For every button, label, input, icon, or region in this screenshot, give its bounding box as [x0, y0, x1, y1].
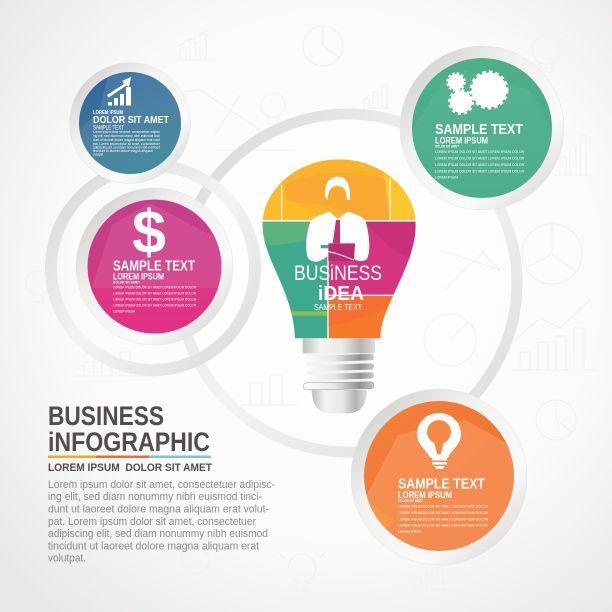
icon: gears: [448, 72, 507, 114]
panel: idea circle: [351, 389, 527, 565]
icon: businessman silhouette: [306, 177, 369, 262]
body paragraph: Lorem ipsum dolor sit amet, consectetuer adipisc-: [48, 479, 275, 491]
settings text: DOLOR SIT AMET: [435, 144, 459, 148]
settings text: LOREM IPSUM DOLOR SIT AMET LOREM IPSUM DOLOR: [435, 163, 524, 167]
idea text: DOLOR SIT AMET: [398, 498, 423, 503]
idea text: LOREM IPSUM DOLOR SIT AMET LOREM IPSUM DOLOR: [398, 524, 488, 528]
growth text: volutpat.: [93, 152, 104, 156]
heading: BUSINESS: [48, 401, 164, 431]
growth text: DOLOR SIT AMET: [93, 114, 169, 126]
idea text: LOREM IPSUM DOLOR SIT AMET LOREM IPSUM DOLOR: [398, 518, 488, 522]
finance text: LOREM IPSUM DOLOR SIT AMET LOREM IPSUM DOLOR: [113, 304, 196, 308]
subheading: LOREM IPSUM DOLOR SIT AMET: [48, 462, 212, 474]
growth text: dunt ut laoreet dolore magna aliquam erat volut: [93, 138, 161, 142]
growth text: ing elit, sed diam nonummy nibh euismod tinci: [93, 134, 160, 138]
finance text: LOREM IPSUM DOLOR SIT AMET LOREM IPSUM DOLOR: [113, 292, 196, 296]
growth text: LOREM IPSUM: [93, 110, 123, 116]
settings text: LOREM IPSUM: [435, 176, 458, 180]
heading: iNFOGRAPHIC: [48, 427, 210, 457]
central light bulb: [260, 157, 420, 413]
heading: [48, 401, 210, 457]
finance text: [113, 259, 196, 314]
title block: [48, 401, 275, 564]
icon: light bulb: [417, 413, 461, 469]
growth text: adipiscing elit, sed diam nonummy nibh euismod: [93, 146, 160, 150]
finance text: LOREM IPSUM: [113, 310, 135, 314]
growth text: [93, 110, 169, 156]
idea text: LOREM IPSUM: [398, 530, 421, 534]
finance text: LOREM IPSUM: [113, 271, 164, 281]
body paragraph: volutpat.: [48, 552, 86, 564]
bulb text: SAMPLE TEXT: [314, 303, 362, 312]
bulb text: [294, 262, 382, 312]
finance text: LOREM IPSUM DOLOR SIT AMET LOREM IPSUM DOLOR: [113, 298, 196, 302]
finance text: LOREM IPSUM DOLOR SIT AMET LOREM IPSUM DOLOR: [113, 286, 196, 290]
bulb text: iDEA: [318, 283, 364, 305]
body paragraph: tincidunt ut laoreet dolore magna aliquam erat: [48, 540, 259, 552]
big connecting ring: [179, 114, 517, 452]
icon: dollar sign: $: [132, 198, 166, 266]
body paragraph: adipiscing elit, sed diam nonummy nibh euismod: [48, 528, 268, 540]
settings text: LOREM IPSUM DOLOR SIT AMET LOREM IPSUM DOLOR: [435, 150, 524, 154]
settings text: LOREM IPSUM: [435, 136, 488, 146]
bulb screw base: [303, 338, 375, 413]
idea text: LOREM IPSUM DOLOR SIT AMET LOREM IPSUM DOLOR: [398, 511, 488, 515]
panel: growth circle: [70, 62, 190, 184]
panel: settings circle: [400, 46, 564, 210]
icon: rising bar chart: [107, 77, 131, 106]
settings text: SAMPLE TEXT: [435, 121, 523, 138]
finance text: SAMPLE TEXT: [113, 259, 195, 275]
growth text: pat. Lorem ipsum dolor sit amet, consectetuer: [93, 142, 161, 146]
body paragraph: [48, 479, 275, 564]
bulb text: BUSiNESS: [294, 262, 382, 285]
left ring around pink circle: [51, 166, 255, 370]
idea text: LOREM IPSUM DOLOR SIT AMET LOREM IPSUM DOLOR: [398, 504, 488, 508]
settings text: [435, 121, 524, 180]
idea text: LOREM IPSUM: [398, 490, 452, 501]
colored underline: [48, 456, 211, 458]
finance text: DOLOR SIT AMET: [113, 280, 140, 285]
growth text: Lorem ipsum dolor sit amet, consectetuer adipisc: [93, 130, 160, 134]
bulb glass segments: [260, 157, 420, 413]
idea text: SAMPLE TEXT: [398, 476, 485, 492]
growth text: SAMPLE TEXT: [93, 124, 124, 132]
body paragraph: pat. Lorem ipsum dolor sit amet, consectetuer: [48, 516, 256, 528]
panel: finance circle: [76, 188, 233, 345]
idea text: [398, 476, 488, 534]
growth text: tincidunt ut laoreet dolore magna aliquam: [93, 149, 153, 153]
body paragraph: ing elit, sed diam nonummy nibh euismod tinci-: [48, 491, 262, 503]
body paragraph: dunt ut laoreet dolore magna aliquam erat volut-: [48, 504, 269, 516]
settings text: LOREM IPSUM DOLOR SIT AMET LOREM IPSUM DOLOR: [435, 170, 524, 174]
settings text: LOREM IPSUM DOLOR SIT AMET LOREM IPSUM DOLOR: [435, 156, 524, 160]
